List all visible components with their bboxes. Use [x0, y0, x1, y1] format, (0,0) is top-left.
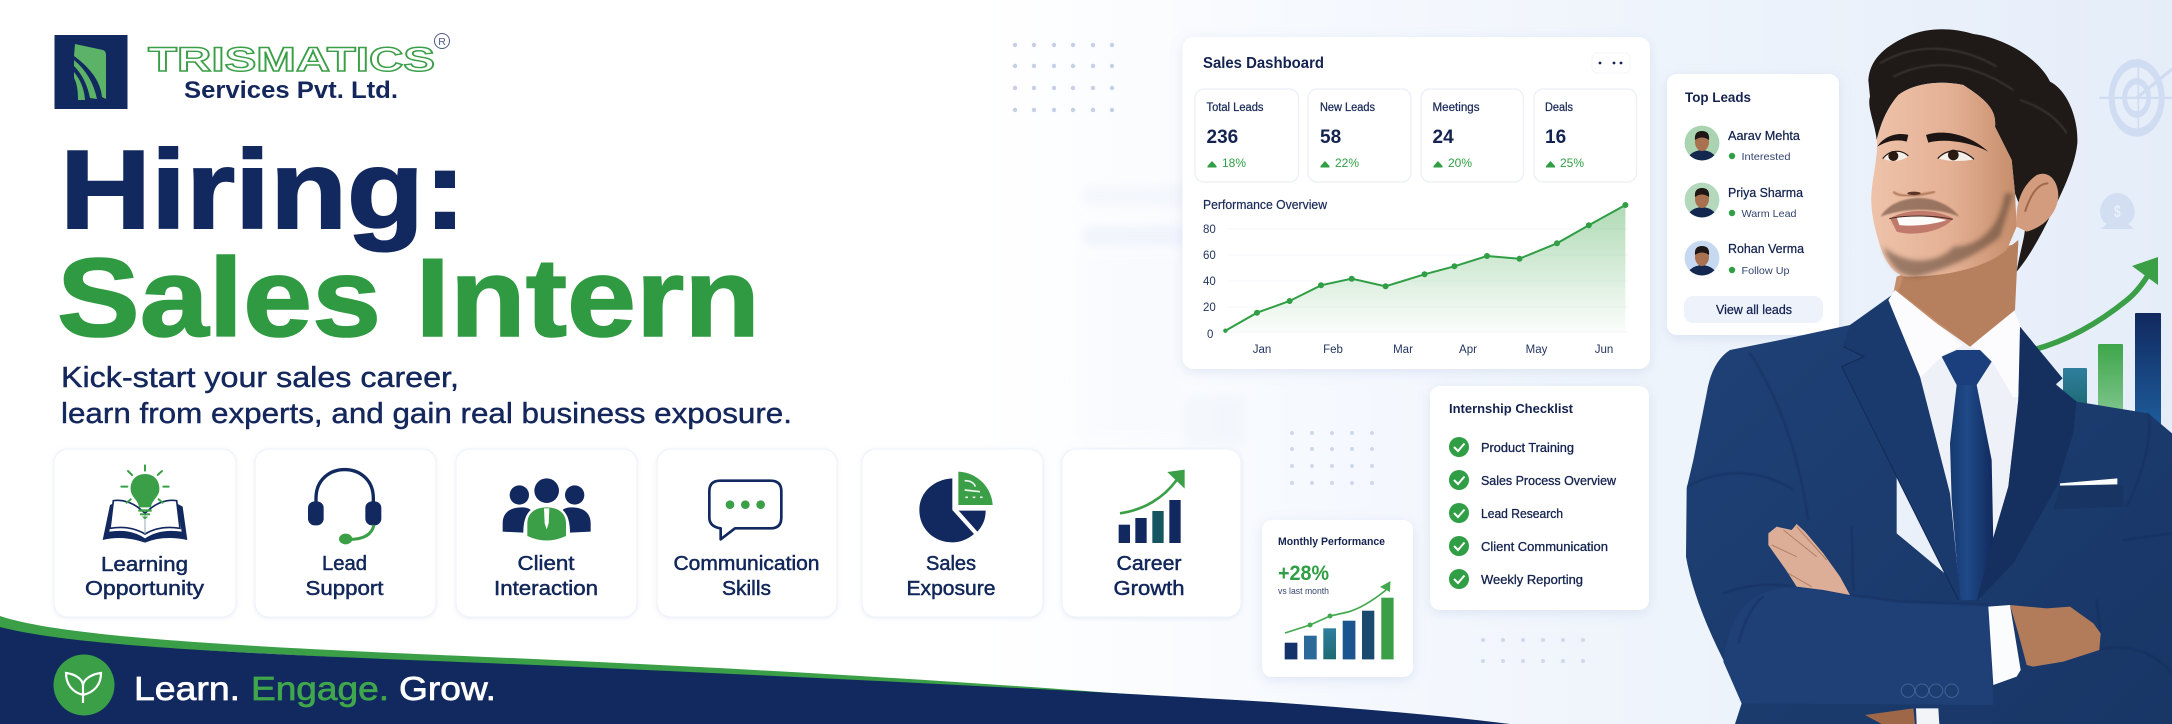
line chart: performance overview: 20 — [1203, 302, 1216, 314]
line chart: performance overview: 60 — [1203, 250, 1216, 262]
moustache — [1881, 198, 1959, 217]
eyes — [1883, 150, 1974, 161]
label: Skills — [722, 578, 771, 600]
item: product training — [1449, 437, 1574, 457]
face — [1871, 83, 2017, 277]
heading: Monthly Performance — [1278, 536, 1385, 548]
arrow: growth trend — [1285, 581, 1390, 633]
nose — [1893, 192, 1935, 196]
line chart: performance overview: 80 — [1203, 224, 1216, 236]
item: client communication — [1449, 536, 1608, 556]
heading: Sales Dashboard — [1203, 55, 1324, 72]
breast pocket — [2053, 478, 2123, 509]
stat: total leads: Total Leads — [1206, 102, 1264, 114]
green stripe — [0, 616, 1150, 696]
title — [57, 128, 760, 360]
logo — [54, 34, 450, 109]
stat: deals: 16 — [1545, 127, 1566, 148]
icon: growth bars and arrow — [1119, 470, 1185, 543]
stat: deals — [1534, 89, 1636, 182]
title: Hiring: — [60, 128, 466, 252]
registered mark: R — [438, 36, 446, 48]
icon: speech bubble — [709, 481, 781, 539]
line chart: performance overview: Apr — [1459, 344, 1477, 356]
lead: aarav mehta — [1684, 126, 1800, 163]
tagline: Grow. — [399, 670, 496, 707]
lower hand and shirt — [1865, 708, 1939, 724]
suit — [1686, 292, 2172, 724]
shirt cuff — [1988, 605, 2021, 685]
label: Communication — [674, 553, 820, 575]
card: learning opportunity — [54, 449, 236, 617]
icon: leaf badge — [54, 654, 114, 716]
item: sales process overview — [1449, 470, 1617, 490]
item: lead research: Lead Research — [1481, 507, 1563, 521]
subtitle: Kick-start your sales career, — [61, 362, 459, 394]
line chart: performance overview: Jun — [1595, 344, 1613, 356]
stat: meetings: 24 — [1432, 127, 1454, 148]
label — [306, 553, 384, 600]
shirt collar — [1888, 290, 2021, 397]
card: sales exposure — [862, 449, 1043, 617]
lead: aarav mehta: Interested — [1742, 151, 1791, 163]
subtitle: learn from experts, and gain real business exposure. — [61, 398, 792, 430]
panel: top leads — [1667, 74, 1839, 335]
stat: new leads — [1308, 89, 1411, 182]
lead: priya sharma — [1684, 182, 1803, 220]
tie — [1942, 350, 1993, 600]
label — [674, 553, 820, 600]
icon: client group — [503, 478, 591, 540]
logo mark — [54, 35, 128, 109]
right hand — [2010, 605, 2101, 667]
line chart: performance overview: May — [1526, 344, 1548, 356]
left forearm sleeve — [1723, 587, 1993, 705]
card: lead support — [255, 449, 436, 617]
stubble — [1883, 193, 2013, 277]
item: lead research — [1449, 503, 1563, 523]
heading: Top Leads — [1685, 89, 1751, 105]
icon: headset — [308, 470, 381, 544]
panel: sales dashboard — [1182, 37, 1650, 369]
card: client interaction — [456, 449, 637, 617]
illustration: businessman — [1686, 29, 2172, 724]
lead: priya sharma: Warm Lead — [1742, 208, 1797, 220]
icon: faint target — [2099, 59, 2172, 137]
shirt — [1888, 300, 2020, 600]
item: weekly reporting — [1449, 569, 1583, 589]
item: product training: Product Training — [1481, 441, 1574, 455]
label: Learning — [101, 554, 188, 576]
label: Sales — [926, 553, 976, 575]
dot pattern: bottom — [1481, 638, 1585, 663]
head — [1868, 29, 2077, 347]
lead: rohan verma — [1684, 240, 1804, 277]
item: client communication: Client Communication — [1481, 540, 1608, 554]
stat: total leads: 236 — [1206, 127, 1238, 148]
stat: new leads: New Leads — [1320, 102, 1375, 114]
growth figure: +28% — [1278, 562, 1329, 585]
lead: rohan verma: Rohan Verma — [1728, 242, 1804, 256]
panel: internship checklist — [1430, 386, 1649, 610]
tagline: Engage. — [251, 670, 389, 707]
tagline — [134, 670, 496, 707]
line chart: performance overview: Jan — [1253, 344, 1271, 356]
stat: total leads — [1195, 89, 1298, 182]
label: Career — [1116, 553, 1182, 575]
lead: priya sharma: Priya Sharma — [1728, 186, 1803, 200]
dot pattern: middle — [1290, 431, 1374, 485]
neck shadow — [1898, 240, 2018, 347]
icon: book with bulb — [103, 465, 187, 543]
growth caption: vs last month — [1278, 586, 1329, 597]
label: Growth — [1114, 578, 1184, 600]
stat: meetings: Meetings — [1432, 102, 1480, 114]
line chart: performance overview: Feb — [1323, 344, 1343, 356]
stat: deals: 25% — [1560, 156, 1584, 170]
line chart: performance overview: 40 — [1203, 276, 1216, 288]
menu button — [1592, 53, 1630, 73]
registered mark — [434, 34, 450, 48]
bar chart — [1285, 598, 1394, 659]
decorative ghost panel — [1078, 186, 1245, 445]
ear — [2016, 174, 2058, 232]
label — [906, 553, 996, 600]
button: view all leads: View all leads — [1716, 303, 1792, 317]
dot pattern: top — [1013, 43, 1114, 112]
stat: total leads: 18% — [1222, 156, 1246, 170]
line chart: performance overview: 0 — [1207, 329, 1213, 341]
line chart: performance overview: Mar — [1393, 344, 1413, 356]
sleeve buttons — [1901, 684, 1958, 697]
chart: background growth bars and arrow — [2033, 257, 2161, 426]
stat: meetings — [1421, 89, 1524, 182]
icon: faint dollar bubble — [2100, 193, 2135, 229]
label: Lead — [322, 553, 367, 575]
subtitle — [61, 362, 792, 430]
eyebrows — [1877, 133, 1988, 152]
panel: monthly performance — [1262, 520, 1413, 677]
stat: meetings: 20% — [1448, 156, 1472, 170]
left hand fingers — [1768, 524, 1850, 595]
bottom band — [0, 616, 1510, 724]
label — [494, 553, 598, 600]
label: Opportunity — [85, 578, 204, 600]
suit folds — [1687, 353, 2172, 673]
label: Interaction — [494, 578, 598, 600]
heading: Internship Checklist — [1449, 401, 1574, 416]
label: Client — [518, 553, 575, 575]
body — [1686, 243, 2172, 724]
lead: aarav mehta: Aarav Mehta — [1728, 129, 1800, 143]
label — [85, 554, 204, 600]
card: career growth — [1062, 449, 1241, 617]
navy band — [0, 627, 1510, 724]
neck — [1893, 243, 2018, 347]
lapels — [1842, 300, 2077, 602]
lead: rohan verma: Follow Up — [1742, 265, 1790, 277]
stat: deals: Deals — [1545, 102, 1573, 114]
label: Support — [306, 578, 384, 600]
item: sales process overview: Sales Process Overview — [1481, 474, 1617, 488]
smile — [1889, 211, 1953, 234]
item: weekly reporting: Weekly Reporting — [1481, 573, 1583, 587]
icon: pie chart — [919, 472, 993, 542]
line chart: performance overview: Performance Overview — [1203, 198, 1328, 212]
card: communication skills — [657, 449, 837, 617]
button: view all leads — [1684, 296, 1823, 323]
benefit cards row — [54, 449, 1241, 617]
title: Sales Intern — [57, 236, 760, 360]
company name: TRISMATICS — [148, 41, 435, 79]
hair highlights — [1880, 49, 2067, 133]
line chart: performance overview — [1203, 198, 1628, 356]
tagline: Learn. — [134, 670, 240, 707]
label — [1114, 553, 1184, 600]
company suffix: Services Pvt. Ltd. — [184, 77, 398, 104]
stat: new leads: 22% — [1335, 156, 1359, 170]
stat: new leads: 58 — [1320, 127, 1341, 148]
label: Exposure — [906, 578, 996, 600]
hair — [1868, 29, 2077, 272]
icon: faint dollar bubble: $ — [2114, 203, 2121, 222]
